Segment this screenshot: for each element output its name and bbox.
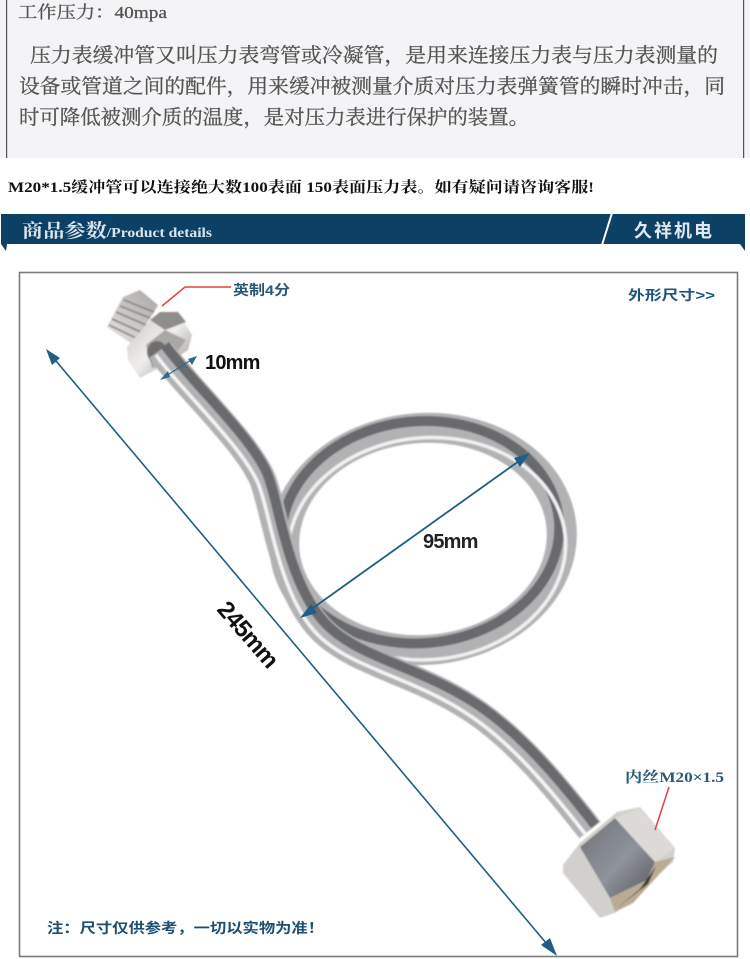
- label: 10mm: 10mm: [205, 352, 260, 374]
- nut opening: [610, 857, 675, 912]
- compatibility note: M20*1.5缓冲管可以连接绝大数100表面 150表面压力表。如有疑问请咨询客服!: [8, 178, 594, 196]
- lower and upper tube run: [156, 345, 595, 835]
- arrow: 245mm overall length: [46, 349, 557, 956]
- coil ring: [272, 409, 575, 672]
- callout: inner thread: 内丝M20×1.5: [625, 768, 724, 786]
- description paragraph: 设备或管道之间的配件，用来缓冲被测量介质对压力表弹簧管的瞬时冲击，同: [19, 75, 725, 98]
- banner title: 商品参数 /Product details: [22, 220, 213, 242]
- arrow: 10mm tube diameter: [160, 356, 197, 380]
- callout: thread size: [162, 282, 290, 306]
- icon: top threaded hex fitting: [107, 290, 192, 378]
- banner brand: 久祥机电: [634, 221, 712, 241]
- callout: thread size: 英制4分: [233, 282, 290, 298]
- icon: bottom hex nut: [563, 807, 675, 918]
- panel: product description: [0, 0, 750, 158]
- description paragraph: 压力表缓冲管又叫压力表弯管或冷凝管，是用来连接压力表与压力表测量的: [30, 44, 718, 67]
- label: 95mm: 95mm: [423, 531, 478, 553]
- footnote: 注：尺寸仅供参考，一切以实物为准！: [47, 920, 324, 936]
- diagram: buffer tube: [156, 345, 595, 835]
- nut right face: [615, 808, 675, 862]
- nut dark face: [580, 818, 655, 898]
- label: 245mm: 245mm: [211, 596, 284, 673]
- outline size label: 外形尺寸>>: [628, 287, 715, 303]
- section banner: [1, 213, 745, 251]
- working pressure line: 工作压力：40mpa: [18, 3, 168, 22]
- description paragraph: 时可降低被测介质的温度，是对压力表进行保护的装置。: [19, 106, 529, 129]
- panel: dimension diagram frame: [20, 272, 738, 956]
- arrow: 95mm ring diameter: [300, 453, 530, 618]
- thread: [107, 290, 158, 344]
- hex body: [127, 312, 192, 378]
- callout: inner thread: [625, 768, 724, 830]
